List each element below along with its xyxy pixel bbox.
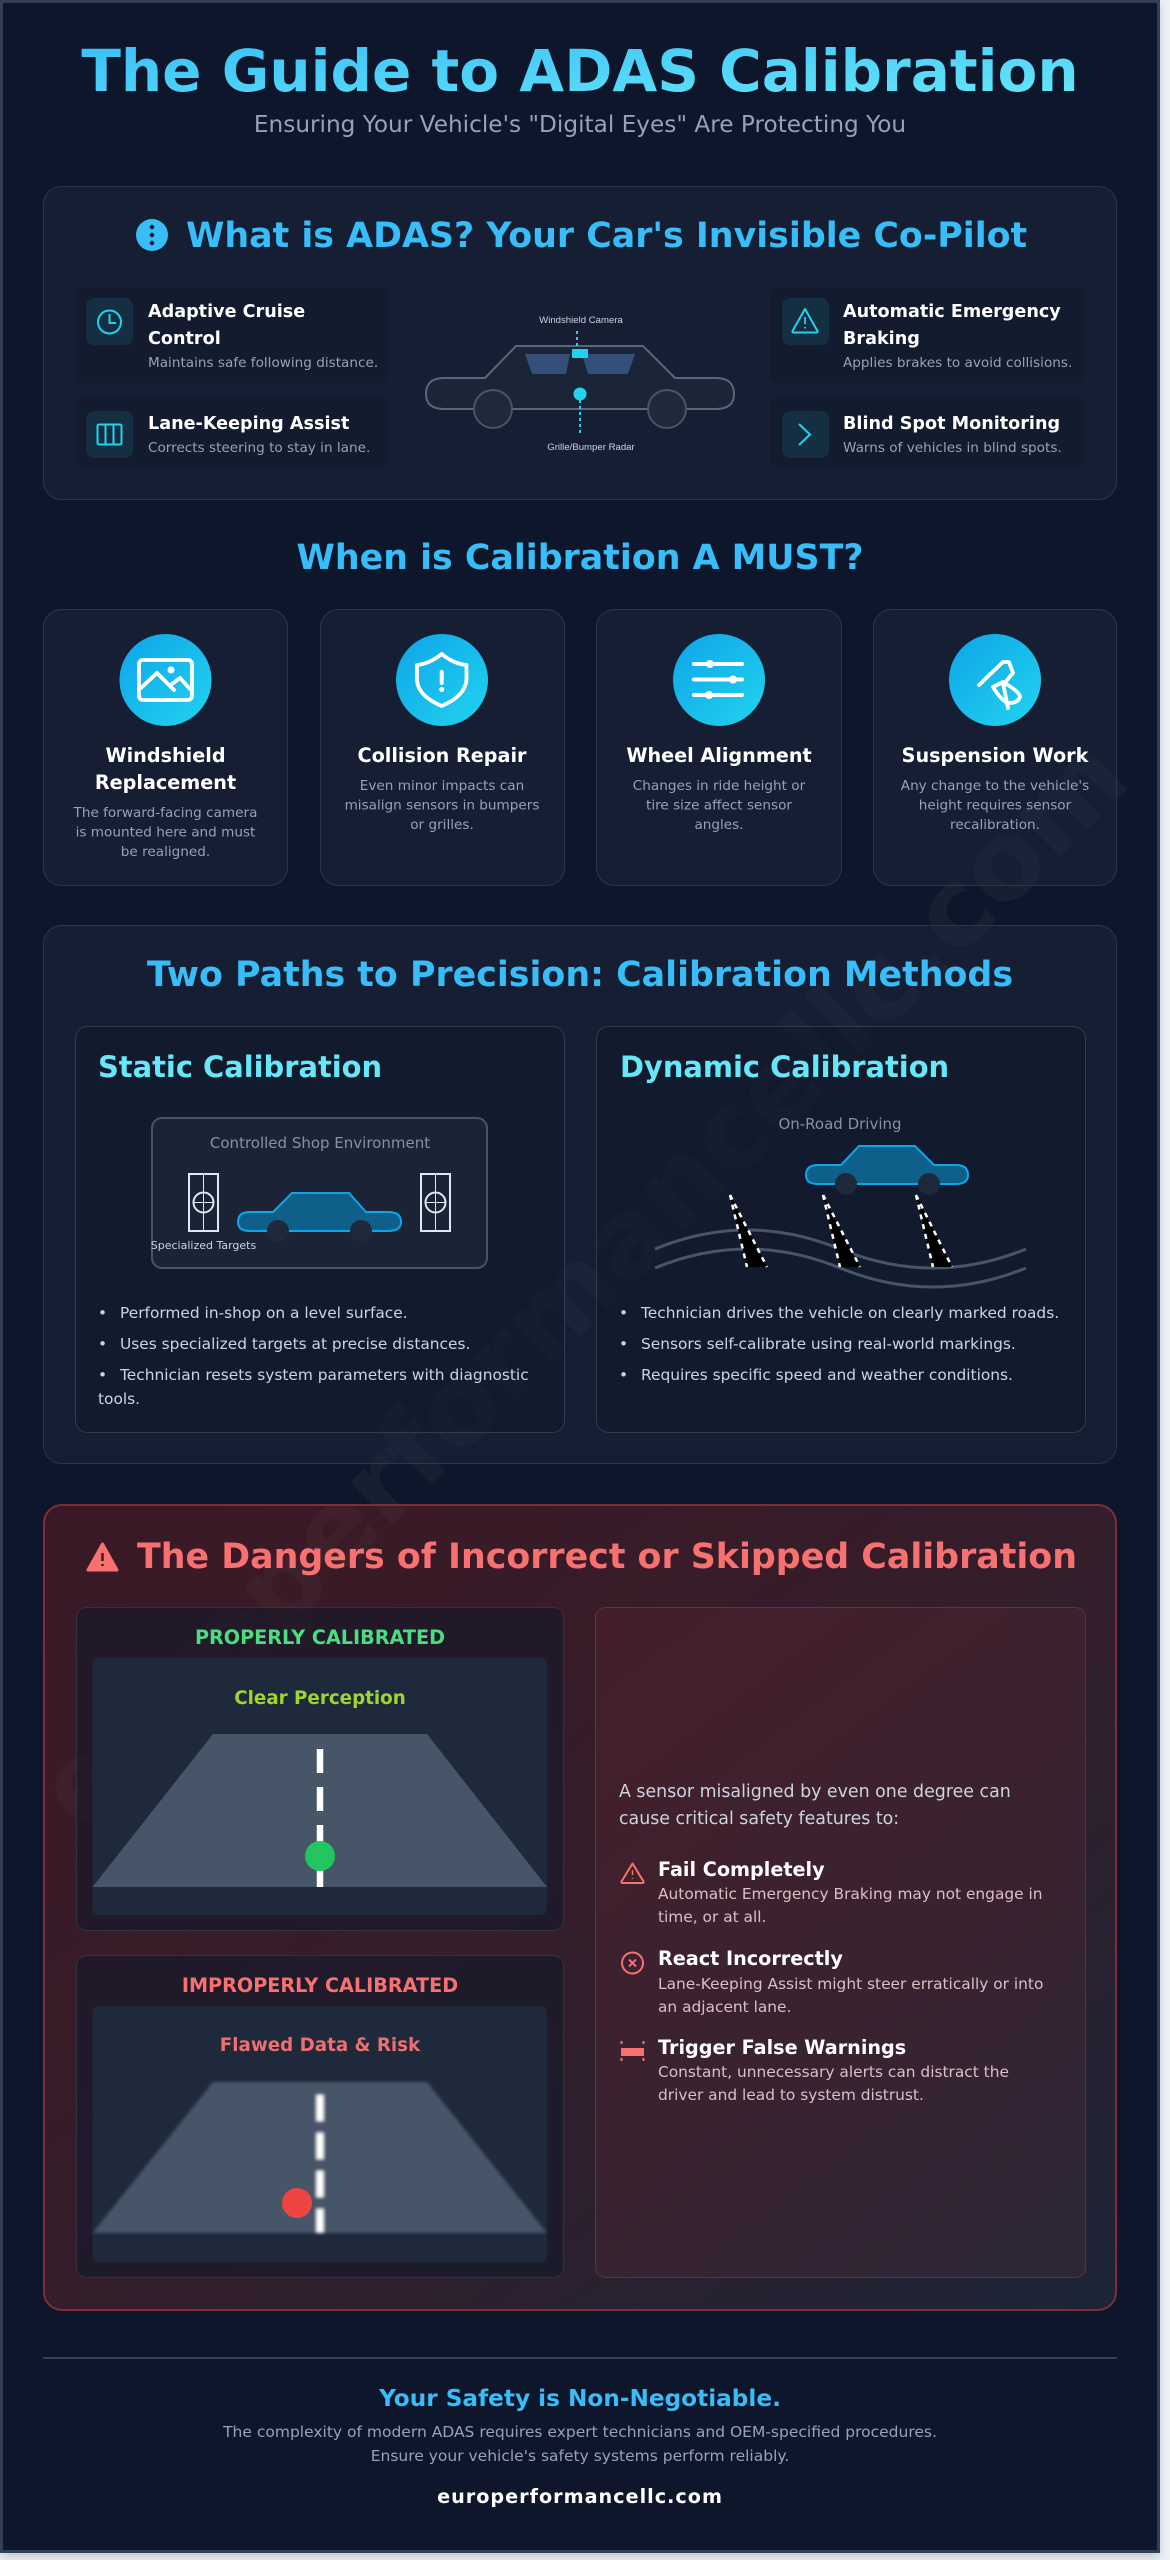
card: windshield replacement: be realigned. xyxy=(121,844,210,860)
card: properly calibrated: PROPERLY CALIBRATED xyxy=(195,1626,445,1649)
list: dynamic points: • xyxy=(619,1366,628,1384)
consequence: react incorrectly: Lane-Keeping Assist might steer erratically or into xyxy=(658,1975,1043,1993)
diagram: shop environment: Specialized Targets xyxy=(151,1239,256,1252)
list: static points: Technician resets system parameters with diagnostic xyxy=(119,1366,529,1384)
card: improperly calibrated xyxy=(76,1956,564,2278)
heading: when is calibration a must: When is Calibration A MUST? xyxy=(296,538,864,578)
card: suspension work: height requires sensor xyxy=(919,798,1072,814)
feature: lane-keeping assist: Lane-Keeping Assist xyxy=(148,414,349,434)
card: properly calibrated xyxy=(76,1608,564,1930)
card: collision repair xyxy=(320,610,564,886)
panel: calibration methods xyxy=(44,926,1116,1464)
feature: automatic emergency braking: Braking xyxy=(843,329,920,349)
heading: dangers: The Dangers of Incorrect or Skipped Calibration xyxy=(137,1537,1077,1577)
card: wheel alignment xyxy=(596,610,842,886)
feature: automatic emergency braking: Automatic Emergency xyxy=(843,302,1061,322)
car sensor diagram: Windshield Camera xyxy=(539,315,624,326)
card: windshield replacement xyxy=(44,610,288,886)
list: static points: Uses specialized targets at precise distances. xyxy=(120,1335,470,1353)
feature: adaptive cruise control: Control xyxy=(148,329,221,349)
feature: blind spot monitoring xyxy=(770,397,1084,467)
feature: automatic emergency braking: Applies brakes to avoid collisions. xyxy=(843,355,1072,371)
consequence: fail completely: Automatic Emergency Braking may not engage in xyxy=(658,1885,1043,1903)
consequence: react incorrectly xyxy=(622,1947,1043,2016)
icon: info circle xyxy=(136,219,168,251)
card: improperly calibrated: IMPROPERLY CALIBRATED xyxy=(182,1974,458,1997)
card: wheel alignment: Wheel Alignment xyxy=(626,744,812,767)
feature: blind spot monitoring: Warns of vehicles in blind spots. xyxy=(843,440,1062,456)
consequence: false warnings xyxy=(621,2036,1009,2104)
card: properly calibrated: Clear Perception xyxy=(234,1688,406,1709)
list: static points: tools. xyxy=(98,1390,140,1408)
feature: adaptive cruise control: Maintains safe following distance. xyxy=(148,355,378,371)
consequence: false warnings: driver and lead to system distrust. xyxy=(658,2086,924,2104)
card: consequences: cause critical safety features to: xyxy=(619,1809,899,1829)
footer xyxy=(43,2357,1117,2508)
diagram: shop environment: Controlled Shop Environment xyxy=(210,1134,430,1152)
list: static points: • xyxy=(98,1335,107,1353)
card: suspension work: Any change to the vehicle's xyxy=(901,778,1089,794)
title: The Guide to ADAS Calibration xyxy=(81,37,1079,105)
consequence: false warnings: Constant, unnecessary alerts can distract the xyxy=(658,2063,1009,2081)
card: consequences: A sensor misaligned by even one degree can xyxy=(619,1782,1011,1802)
card: static calibration xyxy=(76,1026,564,1432)
card: windshield replacement: The forward-facing camera xyxy=(73,805,257,821)
card: collision repair: Collision Repair xyxy=(357,744,527,767)
feature: automatic emergency braking xyxy=(770,287,1084,383)
consequence: fail completely: Fail Completely xyxy=(658,1858,825,1881)
panel: what is ADAS xyxy=(44,186,1116,500)
car sensor diagram xyxy=(426,315,734,453)
list: dynamic points: • xyxy=(619,1304,628,1322)
consequence: fail completely: time, or at all. xyxy=(658,1908,766,1926)
card: dynamic calibration xyxy=(596,1026,1086,1432)
card: improperly calibrated: Flawed Data & Risk xyxy=(220,2035,421,2056)
diagram: on-road driving xyxy=(655,1115,1026,1287)
card: windshield replacement: Windshield xyxy=(105,744,226,767)
card: suspension work xyxy=(874,610,1116,886)
list: dynamic points: Requires specific speed and weather conditions. xyxy=(641,1366,1013,1384)
consequence: react incorrectly: React Incorrectly xyxy=(658,1947,843,1970)
card: wheel alignment: tire size affect sensor xyxy=(646,798,792,814)
icon: warning triangle xyxy=(88,1544,117,1570)
heading: two paths to precision: Two Paths to Precision: Calibration Methods xyxy=(147,955,1013,995)
card: dynamic calibration: Dynamic Calibration xyxy=(620,1050,949,1084)
list: static points: • xyxy=(98,1366,107,1384)
footer: The complexity of modern ADAS requires expert technicians and OEM-specified procedures. xyxy=(222,2423,937,2441)
card: collision repair: Even minor impacts can xyxy=(360,778,524,794)
card: static calibration: Static Calibration xyxy=(98,1050,382,1084)
card: suspension work: Suspension Work xyxy=(902,744,1090,767)
list: static points xyxy=(98,1304,529,1408)
list: dynamic points: Sensors self-calibrate using real-world markings. xyxy=(641,1335,1016,1353)
card: windshield replacement: is mounted here and must xyxy=(76,824,255,840)
list: static points: Performed in-shop on a level surface. xyxy=(120,1304,408,1322)
list: dynamic points: • xyxy=(619,1335,628,1353)
panel: dangers xyxy=(44,1505,1116,2310)
watermark: europerformancellc.com xyxy=(13,713,1152,1852)
diagram: shop environment xyxy=(151,1118,487,1268)
feature: lane-keeping assist xyxy=(75,397,388,467)
diagram: on-road driving: On-Road Driving xyxy=(778,1115,902,1133)
feature: blind spot monitoring: Blind Spot Monitoring xyxy=(843,414,1060,434)
consequence: false warnings: Trigger False Warnings xyxy=(658,2036,906,2059)
footer: Your Safety is Non-Negotiable. xyxy=(378,2385,781,2412)
card: wheel alignment: angles. xyxy=(694,817,744,833)
list: dynamic points: Technician drives the vehicle on clearly marked roads. xyxy=(640,1304,1059,1322)
consequence: react incorrectly: an adjacent lane. xyxy=(658,1998,791,2016)
list: static points: • xyxy=(98,1304,107,1322)
card: wheel alignment: Changes in ride height or xyxy=(633,778,806,794)
feature: lane-keeping assist: Corrects steering to stay in lane. xyxy=(148,440,370,456)
car sensor diagram: Grille/Bumper Radar xyxy=(547,442,636,453)
card: collision repair: misalign sensors in bumpers xyxy=(345,798,539,814)
card: collision repair: or grilles. xyxy=(410,817,474,833)
heading: what is ADAS: What is ADAS? Your Car's Invisible Co-Pilot xyxy=(186,216,1027,256)
footer: europerformancellc.com xyxy=(437,2485,723,2508)
card: consequences xyxy=(596,1608,1086,2278)
feature: adaptive cruise control xyxy=(75,287,388,383)
card: suspension work: recalibration. xyxy=(950,817,1040,833)
card: windshield replacement: Replacement xyxy=(95,771,236,794)
list: dynamic points xyxy=(619,1304,1059,1384)
subtitle: Ensuring Your Vehicle's "Digital Eyes" Are Protecting You xyxy=(254,111,906,138)
consequence: fail completely xyxy=(621,1858,1043,1926)
feature: adaptive cruise control: Adaptive Cruise xyxy=(148,302,305,322)
footer: Ensure your vehicle's safety systems perform reliably. xyxy=(371,2447,789,2465)
